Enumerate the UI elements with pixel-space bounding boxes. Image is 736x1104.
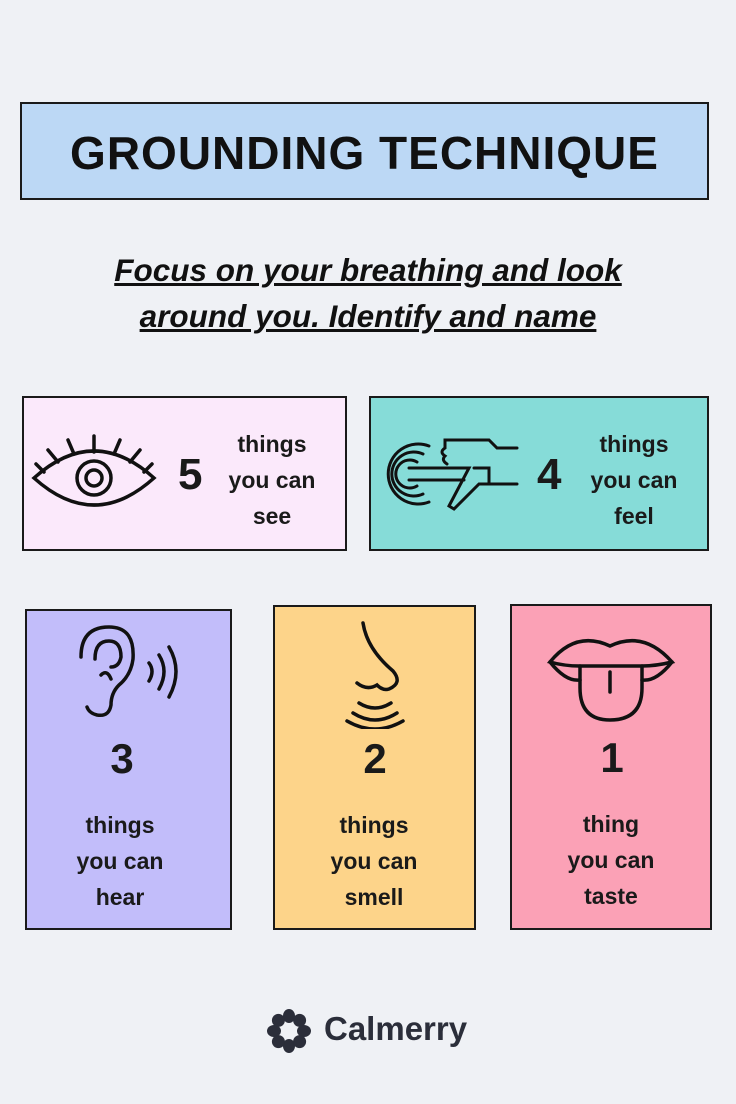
text: things — [86, 812, 154, 838]
text: taste — [584, 883, 638, 909]
panel: see — [22, 396, 347, 551]
text: thing — [583, 811, 639, 837]
title text: GROUNDING TECHNIQUE — [70, 127, 659, 179]
icon: nose — [345, 621, 405, 729]
text — [568, 811, 654, 909]
text: you can — [77, 848, 163, 874]
text — [76, 812, 163, 910]
subtitle — [114, 252, 623, 334]
icon: ear — [79, 625, 178, 717]
logo: Calmerry — [267, 1009, 467, 1053]
number 5: 5 — [178, 450, 202, 499]
text: you can — [568, 847, 654, 873]
panel: smell — [273, 605, 476, 930]
number 2: 2 — [363, 735, 387, 782]
icon: eye — [32, 434, 156, 507]
brand name: Calmerry — [324, 1010, 467, 1047]
text — [330, 812, 417, 910]
text: hear — [96, 884, 144, 910]
text — [228, 431, 315, 529]
text: see — [253, 503, 291, 529]
text: you can — [331, 848, 417, 874]
icon: mouth with tongue — [547, 638, 676, 722]
text: things — [238, 431, 306, 457]
subtitle: around you. Identify and name — [140, 298, 596, 334]
panel: taste — [510, 604, 712, 930]
text: you can — [591, 467, 677, 493]
text: smell — [345, 884, 403, 910]
text: you can — [229, 467, 315, 493]
text — [590, 431, 677, 529]
text: feel — [614, 503, 654, 529]
panel: hear — [25, 609, 232, 930]
text: things — [340, 812, 408, 838]
panel: feel — [369, 396, 709, 551]
subtitle: Focus on your breathing and look — [114, 252, 622, 288]
text: things — [600, 431, 668, 457]
number 4: 4 — [537, 450, 561, 499]
number 1: 1 — [600, 734, 624, 781]
number 3: 3 — [110, 735, 134, 782]
icon: flower — [267, 1009, 311, 1053]
title banner — [20, 102, 709, 200]
icon: hand touching — [386, 438, 518, 511]
